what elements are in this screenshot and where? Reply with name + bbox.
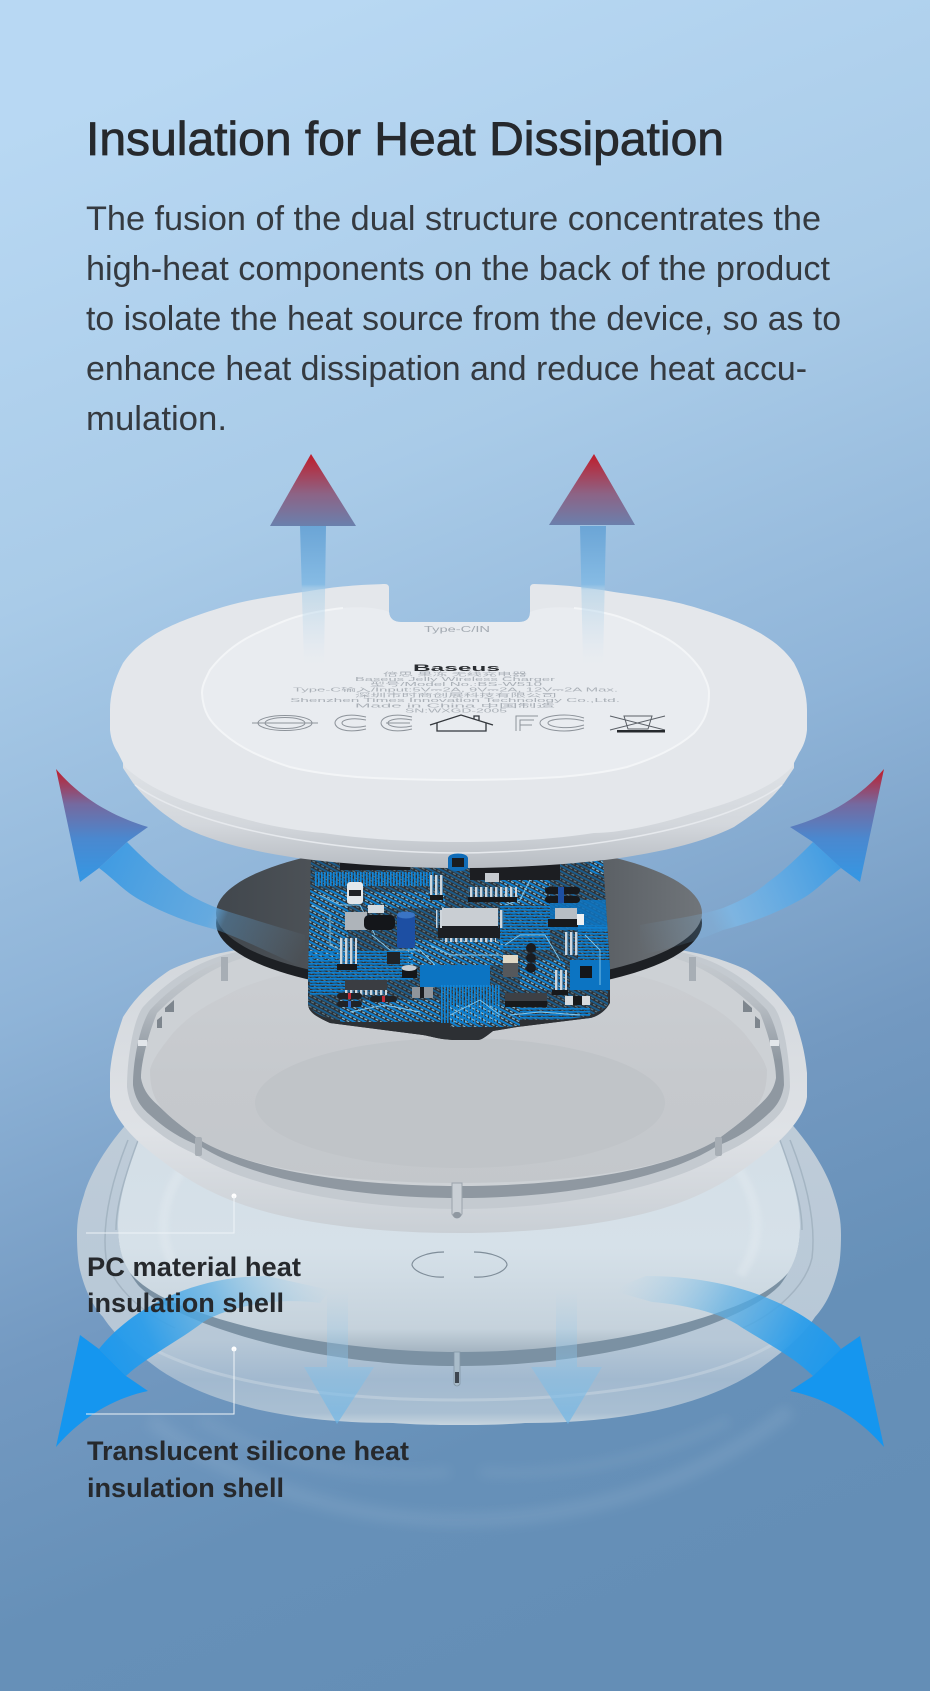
product label text — [290, 663, 620, 714]
product label text: Baseus Jelly Wireless Charger — [355, 677, 556, 683]
arrow: lower right — [610, 1276, 884, 1447]
description paragraph: mulation. — [86, 400, 227, 438]
bottom translucent silicone shell — [77, 1115, 841, 1425]
rim inner ledge — [127, 952, 790, 1209]
arrow: lower left — [56, 1276, 330, 1447]
dark inner ring — [118, 1227, 800, 1366]
centre slot — [452, 1183, 462, 1218]
product label text: Baseus — [413, 663, 500, 674]
bottom centre tab — [454, 1352, 460, 1386]
recessed floor circle — [255, 1038, 665, 1168]
title: Insulation for Heat Dissipation — [86, 112, 724, 165]
product label text: 倍思 果冻 无线充电器 — [383, 670, 529, 678]
callout: PC material — [86, 1194, 301, 1318]
arrow: down left — [304, 1290, 374, 1424]
recessed label area — [202, 607, 709, 780]
small white part — [347, 882, 363, 904]
floor — [150, 973, 767, 1183]
callout: translucent silicone: insulation shell — [87, 1473, 284, 1503]
left silver part and coil — [345, 912, 367, 930]
description paragraph: high-heat components on the back of the product — [86, 250, 831, 288]
callout: PC material: PC material heat — [87, 1252, 301, 1282]
faint reflection under product — [150, 1410, 790, 1520]
callout: translucent silicone — [86, 1346, 409, 1503]
inductor — [545, 887, 580, 894]
inner wall — [141, 958, 776, 1186]
dark board margin — [308, 1006, 608, 1040]
callout: translucent silicone: Translucent silicone heat — [87, 1436, 409, 1466]
arrow: upper left heat flow — [56, 769, 305, 968]
description paragraph: to isolate the heat source from the device, so as to — [86, 300, 841, 338]
arrow: upper right heat flow — [640, 769, 884, 955]
small silver block — [412, 987, 433, 998]
fine circuit traces — [312, 880, 600, 1015]
right chip — [505, 993, 547, 1001]
description paragraph — [86, 200, 841, 438]
product label text: SN:WXGD-2005 — [405, 708, 507, 714]
product label text: 型号/Model No.:BS-W510 — [370, 680, 542, 688]
arrow: up right — [549, 454, 635, 665]
certification icons — [252, 715, 665, 732]
label bevel edge — [202, 608, 709, 780]
centre dimples — [412, 1252, 507, 1277]
disc: wireless coil plate — [216, 841, 702, 995]
circuit board — [308, 860, 612, 1045]
pin headers — [338, 938, 357, 964]
arrow: up left — [270, 454, 356, 665]
dark groove — [133, 955, 784, 1198]
rim ridges — [105, 1135, 813, 1400]
right small parts — [565, 996, 590, 1005]
product label text: Made in China 中国制造 — [355, 702, 558, 710]
resistors — [337, 993, 362, 999]
product label text: 深圳市时商创展科技有限公司 — [355, 691, 557, 699]
capacitor protruding above board — [448, 854, 468, 871]
top lid of charger — [110, 584, 807, 868]
description paragraph: enhance heat dissipation and reduce heat accu- — [86, 350, 807, 388]
left chip — [345, 980, 387, 990]
right silver part — [555, 908, 577, 920]
main chip — [438, 925, 500, 938]
product label text: Type-C输入/Input:5V⎓2A, 9V⎓2A, 12V⎓2A Max. — [293, 686, 618, 694]
arrow: down right — [531, 1290, 602, 1424]
port label: Type-C/IN — [424, 625, 490, 634]
description paragraph: The fusion of the dual structure concentrates the — [86, 200, 821, 238]
product label text: Shenzhen Times Innovation Technology Co.,Ltd. — [290, 698, 620, 704]
black cap — [402, 969, 417, 978]
middle PC heat insulation shell — [110, 950, 807, 1233]
blue capacitor — [397, 915, 415, 948]
bowl interior — [118, 1115, 800, 1352]
callout: PC material: insulation shell — [87, 1288, 284, 1318]
electronic components — [337, 873, 592, 1007]
